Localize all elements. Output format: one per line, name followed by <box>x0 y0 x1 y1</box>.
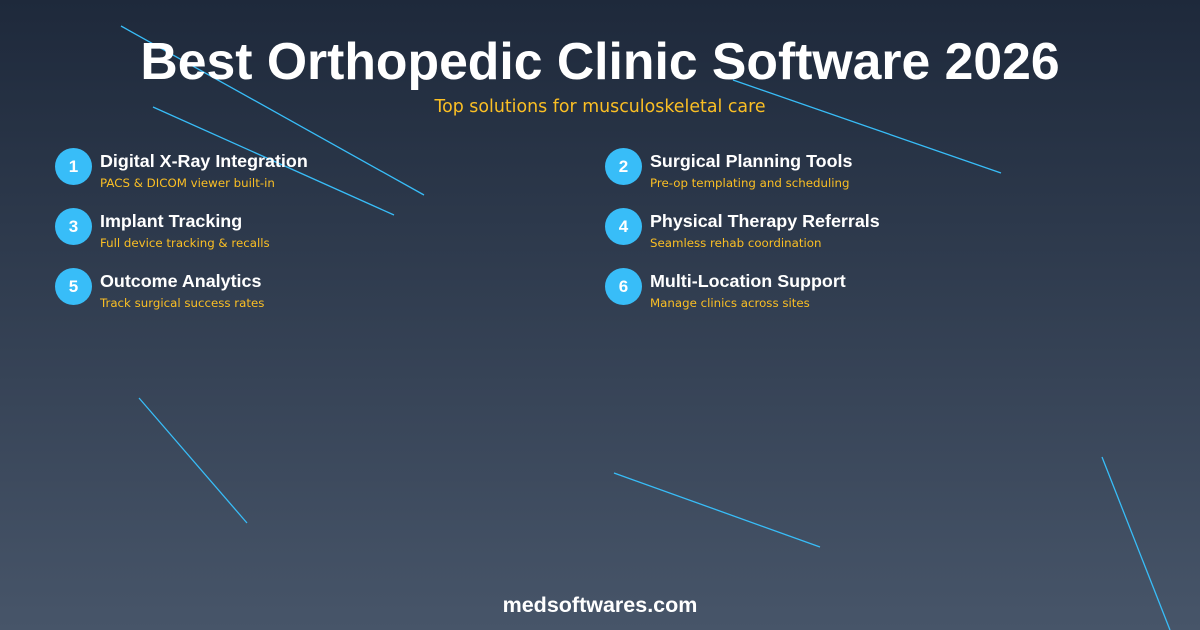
item 2 <box>605 148 852 190</box>
item 1: PACS & DICOM viewer built-in <box>100 176 275 190</box>
item 6: 6 <box>619 277 628 296</box>
item 3: Full device tracking & recalls <box>100 236 270 250</box>
item 5 <box>55 268 264 310</box>
item 4: Physical Therapy Referrals <box>650 211 880 231</box>
item 3: Implant Tracking <box>100 211 242 231</box>
item 5: Track surgical success rates <box>100 296 264 310</box>
item 4: 4 <box>619 217 628 236</box>
subtitle: Top solutions for musculoskeletal care <box>434 97 766 117</box>
item 1 <box>55 148 308 190</box>
item 3 <box>55 208 270 250</box>
item 5: 5 <box>69 277 78 296</box>
item 1: 1 <box>69 157 78 176</box>
item 6: Multi-Location Support <box>650 271 846 291</box>
item 4: Seamless rehab coordination <box>650 236 821 250</box>
item 3: 3 <box>69 217 78 236</box>
item 2: Pre-op templating and scheduling <box>650 176 849 190</box>
title: Best Orthopedic Clinic Software 2026 <box>140 32 1060 90</box>
footer: medsoftwares.com <box>503 593 697 617</box>
item 1: Digital X-Ray Integration <box>100 151 308 171</box>
item 6: Manage clinics across sites <box>650 296 810 310</box>
item 2: Surgical Planning Tools <box>650 151 852 171</box>
item 4 <box>605 208 880 250</box>
item 6 <box>605 268 846 310</box>
item 5: Outcome Analytics <box>100 271 261 291</box>
item 2: 2 <box>619 157 628 176</box>
